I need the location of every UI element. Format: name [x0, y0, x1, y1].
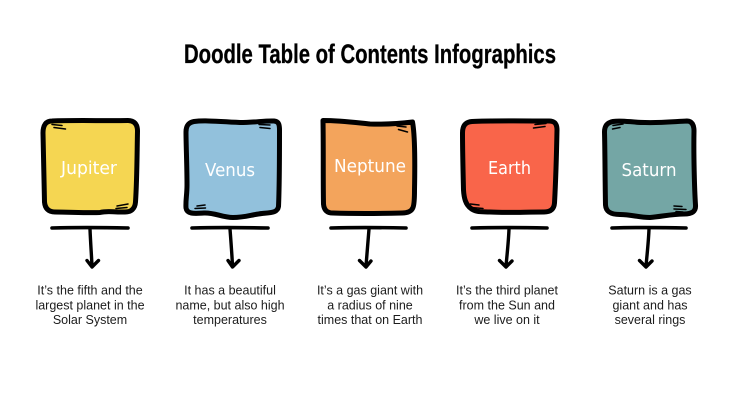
- description: from the Sun and: [459, 298, 555, 312]
- panel: Earth: [456, 121, 558, 327]
- arrow: [472, 228, 547, 267]
- panel: Neptune: [317, 120, 423, 327]
- title: Doodle Table of Contents Infographics: [184, 39, 556, 69]
- box: Jupiter: [43, 120, 138, 213]
- highlight marks: [195, 124, 270, 208]
- description: temperatures: [193, 313, 267, 327]
- description: It has a beautiful: [184, 284, 276, 298]
- arrow: [52, 228, 128, 267]
- description: It’s the fifth and the: [37, 284, 143, 298]
- highlight marks: [397, 126, 408, 132]
- arrow: [612, 228, 686, 267]
- description: several rings: [615, 313, 685, 327]
- highlight marks: [52, 124, 128, 208]
- description: name, but also high: [175, 298, 285, 312]
- description: giant and has: [612, 298, 688, 312]
- label: Neptune: Neptune: [334, 157, 406, 177]
- description: a radius of nine: [327, 298, 413, 312]
- arrow: [331, 228, 406, 267]
- label: Earth: Earth: [488, 159, 531, 179]
- description: largest planet in the: [35, 298, 145, 312]
- panel: Venus: [175, 121, 285, 327]
- description: we live on it: [473, 313, 540, 327]
- box: Neptune: [323, 120, 415, 213]
- label: Saturn: Saturn: [622, 161, 676, 181]
- description: It’s the third planet: [456, 284, 558, 298]
- box: Venus: [186, 121, 280, 218]
- label: Venus: Venus: [205, 161, 255, 181]
- panel: Saturn: [604, 121, 696, 327]
- panel: Jupiter: [35, 120, 145, 327]
- arrow: [192, 228, 268, 267]
- box: Earth: [462, 121, 557, 212]
- description: Solar System: [53, 313, 127, 327]
- highlight marks: [470, 124, 546, 208]
- box: Saturn: [604, 121, 696, 218]
- description: Saturn is a gas: [608, 284, 692, 298]
- label: Jupiter: Jupiter: [60, 159, 118, 179]
- description: It’s a gas giant with: [317, 284, 423, 298]
- description: times that on Earth: [318, 313, 423, 327]
- highlight marks: [612, 124, 686, 212]
